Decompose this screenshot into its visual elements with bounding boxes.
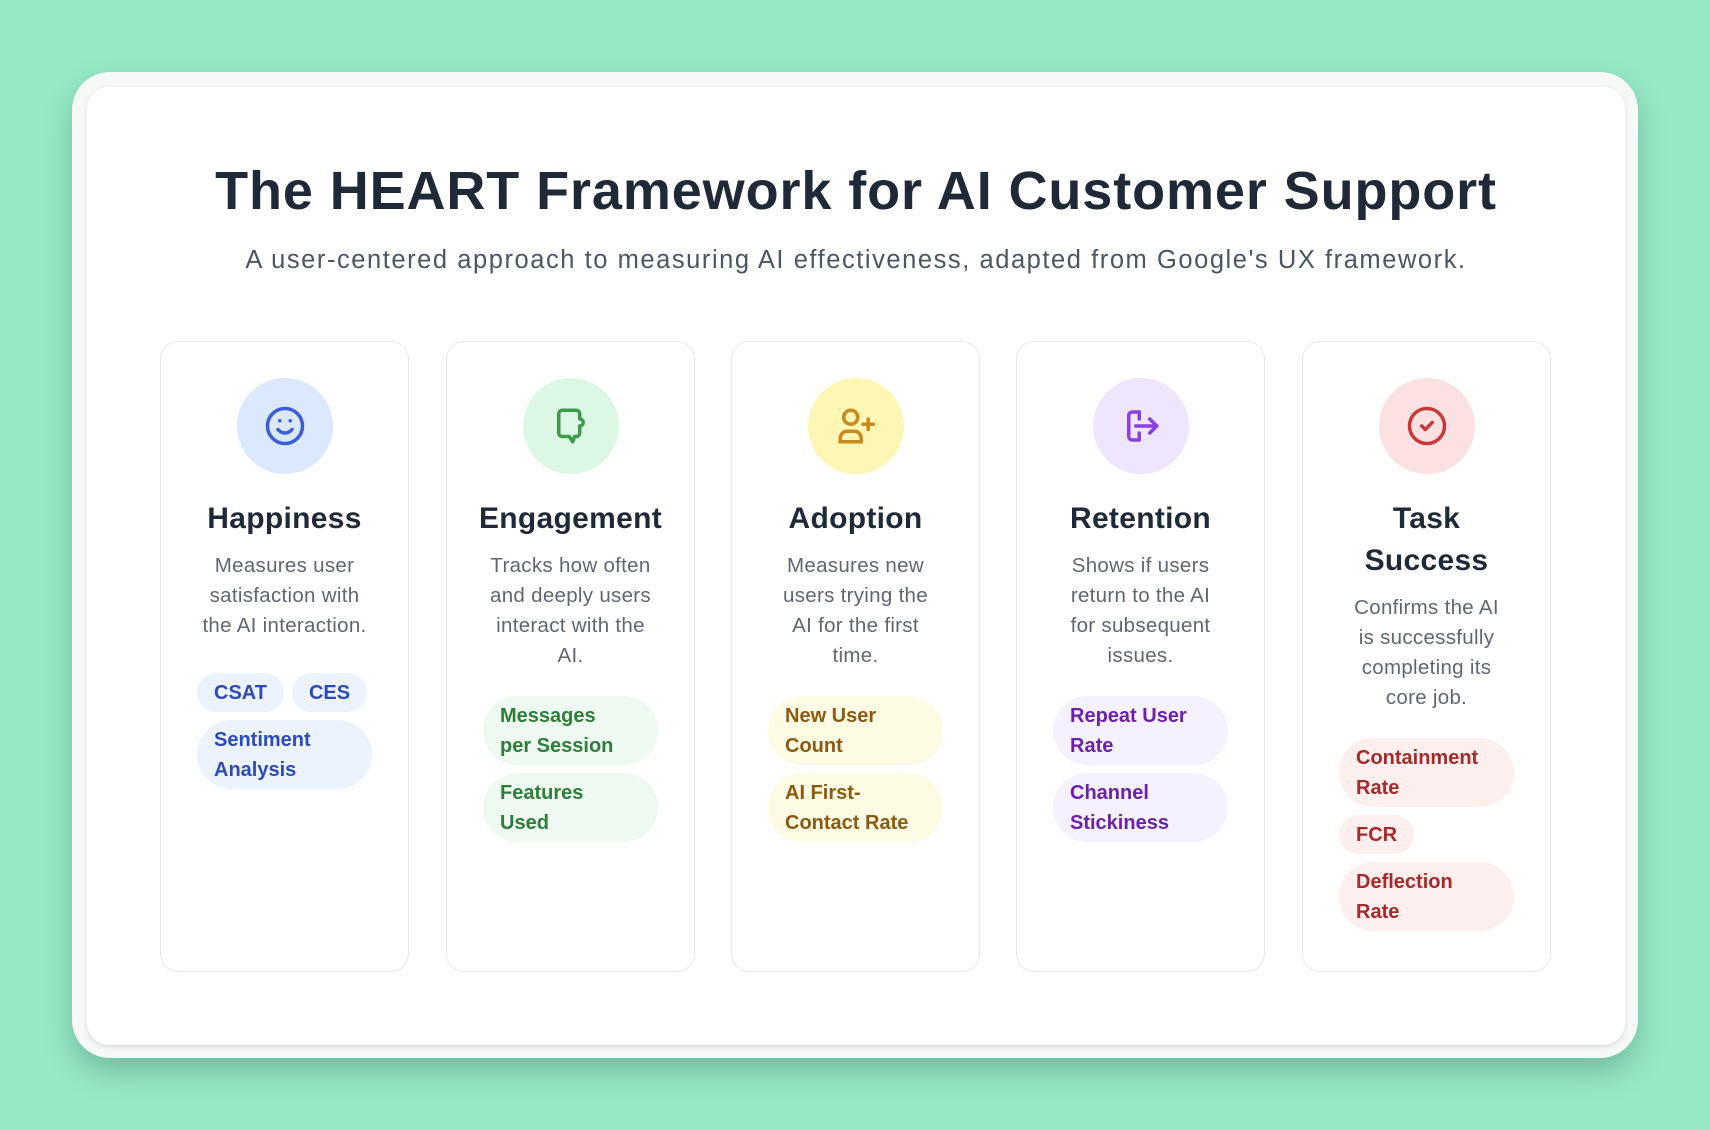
tags: [1339, 738, 1514, 931]
heading: Task: [1393, 502, 1460, 535]
description: [1070, 554, 1210, 667]
panel: happiness: [160, 341, 409, 972]
tags: Analysis: [214, 758, 296, 780]
description: users trying the: [783, 584, 928, 607]
description: time.: [833, 644, 878, 667]
heading: Happiness: [207, 502, 362, 535]
description: AI.: [558, 644, 583, 667]
tags: New User: [785, 704, 876, 726]
heading: Engagement: [479, 502, 662, 535]
description: [202, 554, 367, 637]
tags: Contact Rate: [785, 812, 908, 834]
description: the AI interaction.: [202, 614, 367, 637]
description: core job.: [1386, 686, 1467, 709]
tags: Sentiment: [214, 728, 311, 750]
description: return to the AI: [1071, 584, 1210, 607]
tags: [483, 696, 658, 842]
panel: retention: [1016, 341, 1265, 972]
description: for subsequent: [1071, 614, 1210, 637]
heading: Success: [1365, 544, 1488, 577]
icon: chat bubble: [522, 378, 618, 474]
description: Measures user: [215, 554, 354, 577]
tags: per Session: [500, 734, 613, 756]
tags: Messages: [500, 704, 596, 726]
description: AI for the first: [792, 614, 919, 637]
tags: Used: [500, 812, 549, 834]
tags: Stickiness: [1070, 812, 1169, 834]
tags: Deflection: [1356, 870, 1453, 892]
description: satisfaction with: [210, 584, 359, 607]
tags: Count: [785, 734, 843, 756]
description: Tracks how often: [490, 554, 651, 577]
tags: FCR: [1356, 824, 1397, 846]
description: Shows if users: [1072, 554, 1209, 577]
tags: Rate: [1356, 776, 1399, 798]
outer frame: [72, 72, 1638, 1058]
description: and deeply users: [490, 584, 651, 607]
tags: Repeat User: [1070, 704, 1187, 726]
description: Measures new: [787, 554, 924, 577]
tags: CSAT: [214, 682, 267, 704]
panel: engagement: [446, 341, 695, 972]
tags: [768, 696, 943, 842]
tags: AI First-: [785, 782, 861, 804]
panel: adoption: [731, 341, 980, 972]
inner card: [87, 87, 1625, 1045]
tags: Features: [500, 782, 583, 804]
description: [490, 554, 651, 667]
description: [1354, 596, 1499, 709]
tags: [1053, 696, 1228, 842]
description: Confirms the AI: [1354, 596, 1499, 619]
icon: return arrow: [1092, 378, 1188, 474]
description: completing its: [1362, 656, 1491, 679]
icon: smiley: [236, 378, 332, 474]
tags: CES: [309, 682, 350, 704]
heading: Retention: [1070, 502, 1211, 535]
description: [783, 554, 928, 667]
description: interact with the: [496, 614, 645, 637]
icon: user plus: [808, 378, 904, 474]
heading: [1365, 502, 1488, 577]
icon: check circle: [1378, 378, 1474, 474]
panel: task success: [1302, 341, 1551, 972]
tags: Containment: [1356, 746, 1478, 768]
subtitle: A user-centered approach to measuring AI effectiveness, adapted from Google's UX framework.: [245, 246, 1467, 274]
tags: Channel: [1070, 782, 1149, 804]
description: issues.: [1108, 644, 1173, 667]
description: is successfully: [1359, 626, 1494, 649]
tags: Rate: [1356, 900, 1399, 922]
tags: [197, 673, 372, 789]
title: The HEART Framework for AI Customer Support: [215, 161, 1497, 221]
heading: Adoption: [788, 502, 923, 535]
tags: Rate: [1070, 734, 1113, 756]
